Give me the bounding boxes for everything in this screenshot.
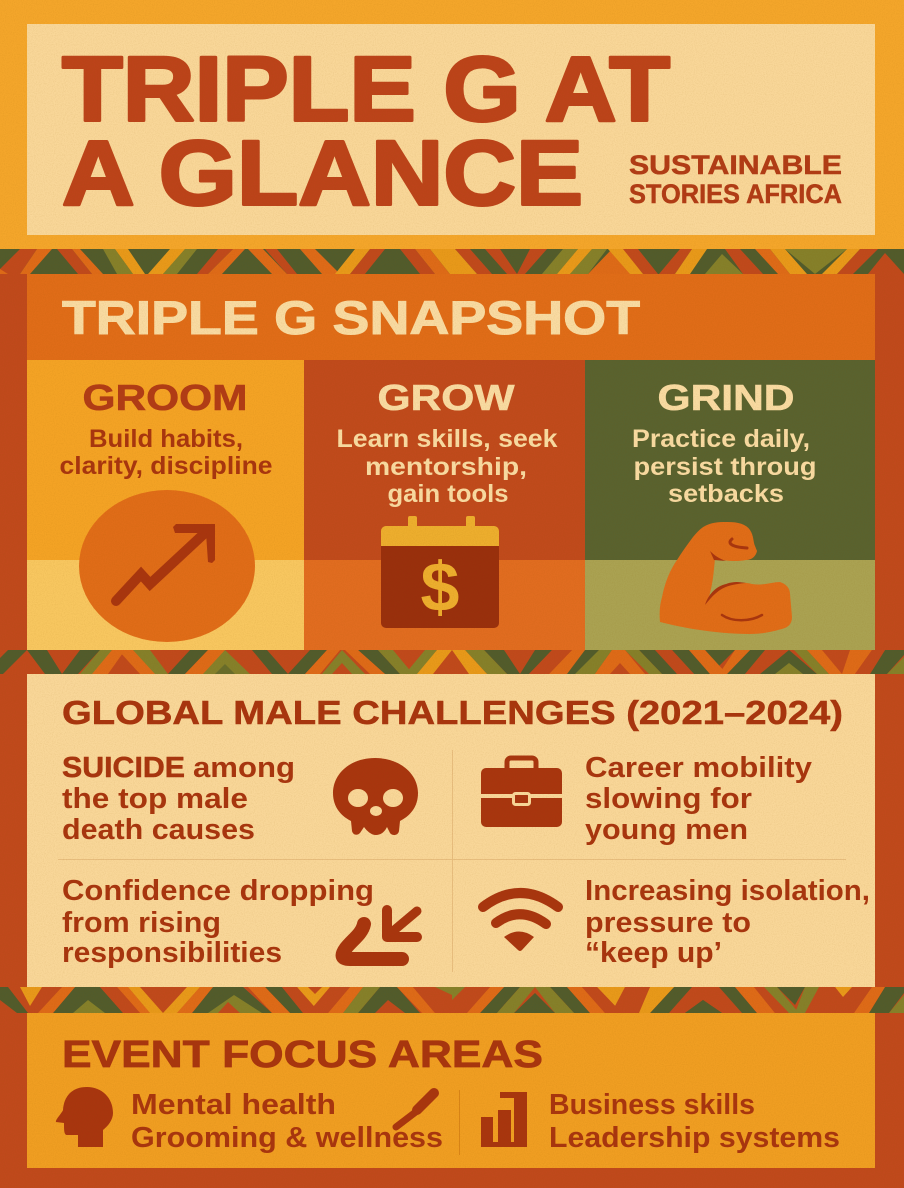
item: career mobility: slowing for xyxy=(585,783,752,815)
icon: growth arrow xyxy=(79,490,255,642)
panel: event focus areas xyxy=(27,1013,875,1168)
item: suicide: among xyxy=(193,752,295,784)
column: groom: GROOM xyxy=(82,377,248,418)
title xyxy=(62,38,670,224)
item: isolation: “keep up’ xyxy=(585,937,722,969)
text: business and leadership: Leadership systems xyxy=(549,1122,840,1154)
icon: down-left arrow xyxy=(343,910,417,959)
panel: title banner xyxy=(27,24,875,235)
icon: bar chart xyxy=(481,1092,527,1147)
item: career mobility xyxy=(481,752,812,846)
item: confidence: Confidence dropping xyxy=(62,875,374,907)
column: groom: clarity, discipline xyxy=(60,452,273,480)
item: confidence: from rising xyxy=(62,907,221,939)
subtitle: organisation: STORIES AFRICA xyxy=(629,179,842,209)
item: isolation: pressure to xyxy=(585,907,751,939)
heading: snapshot: TRIPLE G SNAPSHOT xyxy=(62,291,640,344)
column: grow: gain tools xyxy=(388,480,508,508)
item: suicide: death causes xyxy=(62,814,255,846)
item: confidence: responsibilities xyxy=(62,937,282,969)
title: A GLANCE xyxy=(62,122,583,224)
column: grind: GRIND xyxy=(658,377,794,418)
text: mental health and grooming xyxy=(131,1089,443,1154)
column: grind: Practice daily, xyxy=(632,425,810,453)
icon: head xyxy=(56,1087,113,1147)
text: mental health and grooming: Mental health xyxy=(131,1089,336,1121)
icon: flexed muscle xyxy=(660,522,792,634)
heading: challenges: GLOBAL MALE CHALLENGES (2021–2024) xyxy=(62,694,843,731)
column: grow: GROW xyxy=(378,377,515,418)
icon: skull xyxy=(333,758,418,835)
icon: calendar with dollar: $ xyxy=(421,548,459,626)
item: career mobility: young men xyxy=(585,814,748,846)
text: business and leadership xyxy=(549,1089,840,1154)
panel: global male challenges xyxy=(27,674,875,987)
icon: signal xyxy=(483,893,558,951)
column: grow xyxy=(304,360,585,650)
text: mental health and grooming: Grooming & wellness xyxy=(131,1122,443,1154)
column: groom xyxy=(27,360,304,650)
column: grind xyxy=(585,360,875,650)
title: TRIPLE G AT xyxy=(62,38,670,140)
column: grind: persist throug xyxy=(634,453,816,481)
item: suicide xyxy=(62,752,418,846)
subtitle: organisation xyxy=(629,150,842,209)
subtitle: organisation: SUSTAINABLE xyxy=(629,150,842,180)
column: groom: Build habits, xyxy=(89,425,243,453)
column: grow: Learn skills, seek xyxy=(336,425,558,453)
item: confidence xyxy=(62,875,417,969)
text: business and leadership: Business skills xyxy=(549,1089,755,1121)
item: career mobility: Career mobility xyxy=(585,752,812,784)
icon: briefcase xyxy=(481,758,562,827)
column: grind: setbacks xyxy=(668,480,784,508)
panel: Triple G snapshot xyxy=(27,274,875,650)
heading: focus areas: EVENT FOCUS AREAS xyxy=(62,1034,543,1076)
item: isolation xyxy=(483,875,870,969)
item: suicide: the top male xyxy=(62,783,248,815)
item: suicide: SUICIDE xyxy=(62,752,185,784)
icon: razor xyxy=(396,1093,434,1127)
icon: calendar with dollar xyxy=(381,516,499,628)
column: grow: mentorship, xyxy=(365,453,527,481)
item: isolation: Increasing isolation, xyxy=(585,875,870,907)
